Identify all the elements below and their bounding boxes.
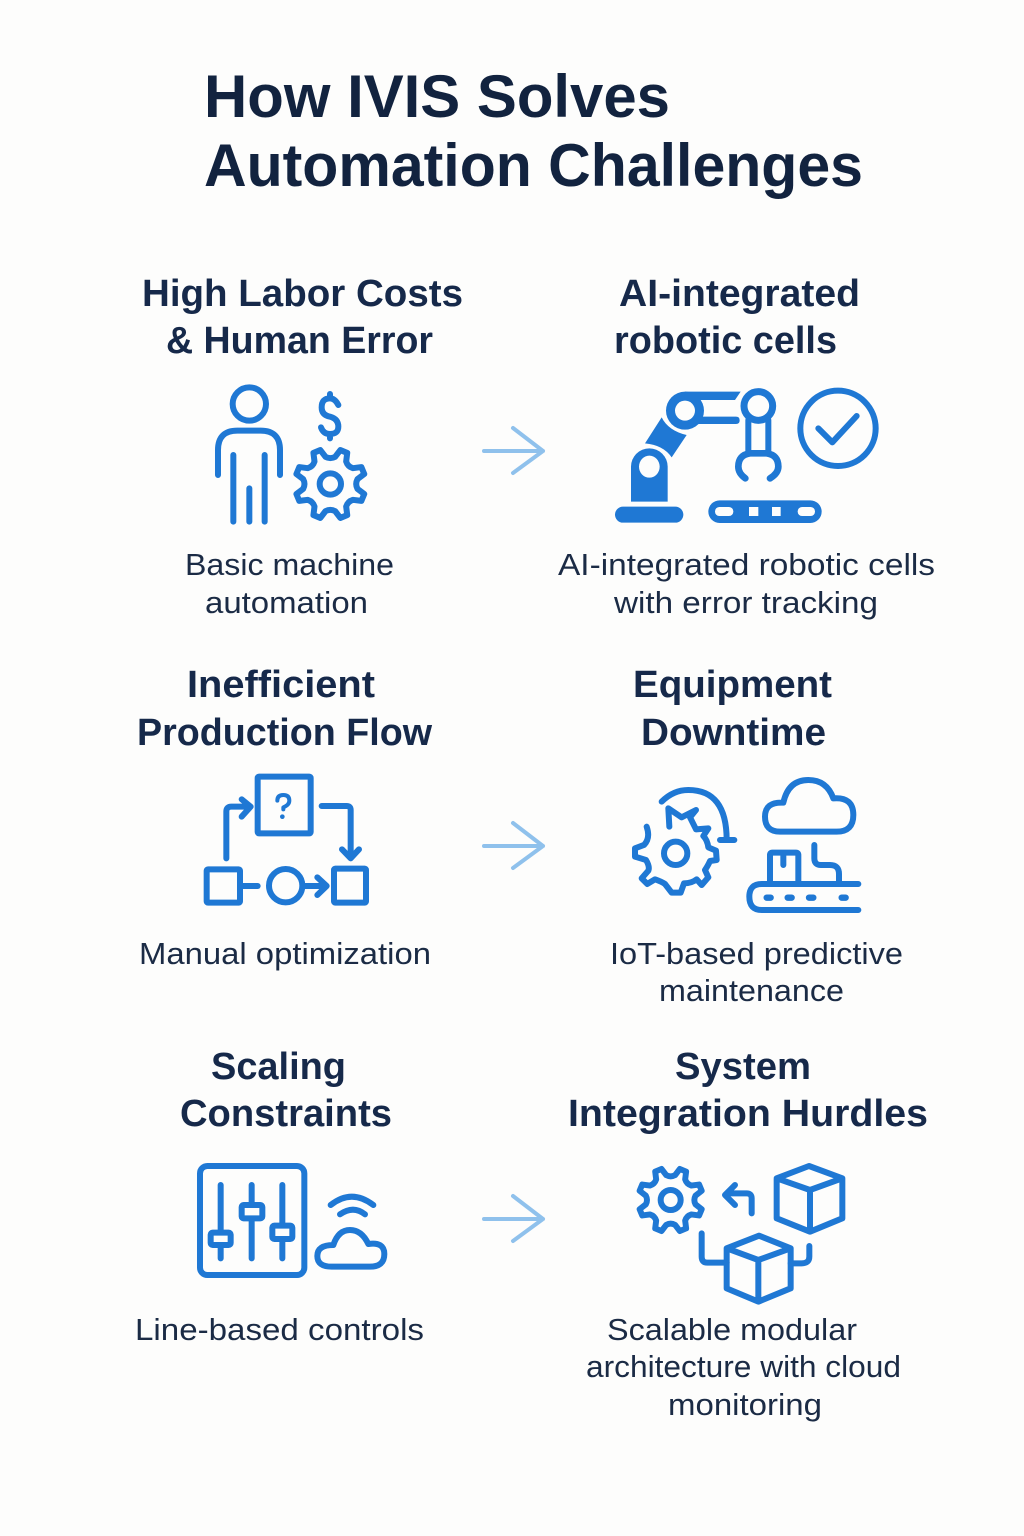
heading: system integration hurdles: System — [675, 1046, 811, 1088]
text: basic machine automation: Basic machine — [185, 547, 394, 582]
icon: robot arm, conveyor and check — [615, 391, 876, 523]
title: How IVIS Solves — [204, 63, 670, 130]
text: scalable modular architecture: architecture with cloud — [586, 1349, 901, 1384]
text: ai-integrated cells with error tracking: AI-integrated robotic cells — [558, 547, 935, 582]
text: ai-integrated cells with error tracking: with error tracking — [613, 585, 878, 620]
title — [204, 63, 863, 199]
heading: inefficient production flow — [137, 664, 432, 754]
text: scalable modular architecture — [586, 1312, 901, 1422]
heading: high labor costs: High Labor Costs — [142, 273, 463, 315]
heading: ai-integrated robotic cells: AI-integrated — [619, 273, 860, 315]
heading: system integration hurdles: Integration Hurdles — [568, 1093, 928, 1135]
panel: inefficient production flow — [137, 664, 432, 971]
heading: equipment downtime — [633, 664, 832, 754]
heading: equipment downtime: Equipment — [633, 664, 832, 706]
icon: person, dollar and gear — [218, 387, 364, 522]
heading: inefficient production flow: Production Flow — [137, 712, 432, 754]
panel: ai-integrated robotic cells — [558, 273, 935, 620]
text: scalable modular architecture: Scalable modular — [607, 1312, 857, 1347]
text: iot-based predictive maintenance: IoT-based predictive — [610, 936, 903, 971]
heading: scaling constraints — [180, 1046, 392, 1135]
heading: ai-integrated robotic cells — [614, 273, 860, 362]
icon: gear and modular cubes — [640, 1166, 842, 1302]
panel: scaling constraints — [135, 1046, 424, 1347]
icon: control sliders and wireless cloud — [200, 1166, 384, 1275]
text: scalable modular architecture: monitoring — [668, 1387, 822, 1422]
panel: high labor costs and human error — [142, 273, 463, 620]
heading: high labor costs — [142, 273, 463, 362]
heading: scaling constraints: Scaling — [211, 1046, 346, 1088]
heading: inefficient production flow: Inefficient — [187, 664, 375, 706]
arrow: row 2 — [484, 823, 543, 868]
text: basic machine automation: automation — [205, 585, 368, 620]
icon: gear, cloud and conveyor — [635, 780, 858, 910]
heading: equipment downtime: Downtime — [641, 712, 826, 754]
title: Automation Challenges — [204, 132, 863, 199]
text: ai-integrated cells with error tracking — [558, 547, 935, 620]
text: line-based controls: Line-based controls — [135, 1312, 424, 1347]
heading: system integration hurdles — [568, 1046, 928, 1135]
arrow: row 3 — [484, 1196, 543, 1241]
panel: system integration hurdles — [568, 1046, 928, 1422]
text: manual optimization: Manual optimization — [139, 936, 431, 971]
text: iot-based predictive maintenance — [610, 936, 903, 1008]
icon: flow diagram with question mark — [207, 777, 366, 903]
heading: scaling constraints: Constraints — [180, 1093, 392, 1135]
text: basic machine automation — [185, 547, 394, 620]
heading: ai-integrated robotic cells: robotic cells — [614, 320, 837, 362]
heading: high labor costs: & Human Error — [166, 320, 433, 362]
text: iot-based predictive maintenance: maintenance — [659, 973, 844, 1008]
panel: equipment downtime — [610, 664, 903, 1008]
arrow: row 1 — [484, 428, 543, 473]
